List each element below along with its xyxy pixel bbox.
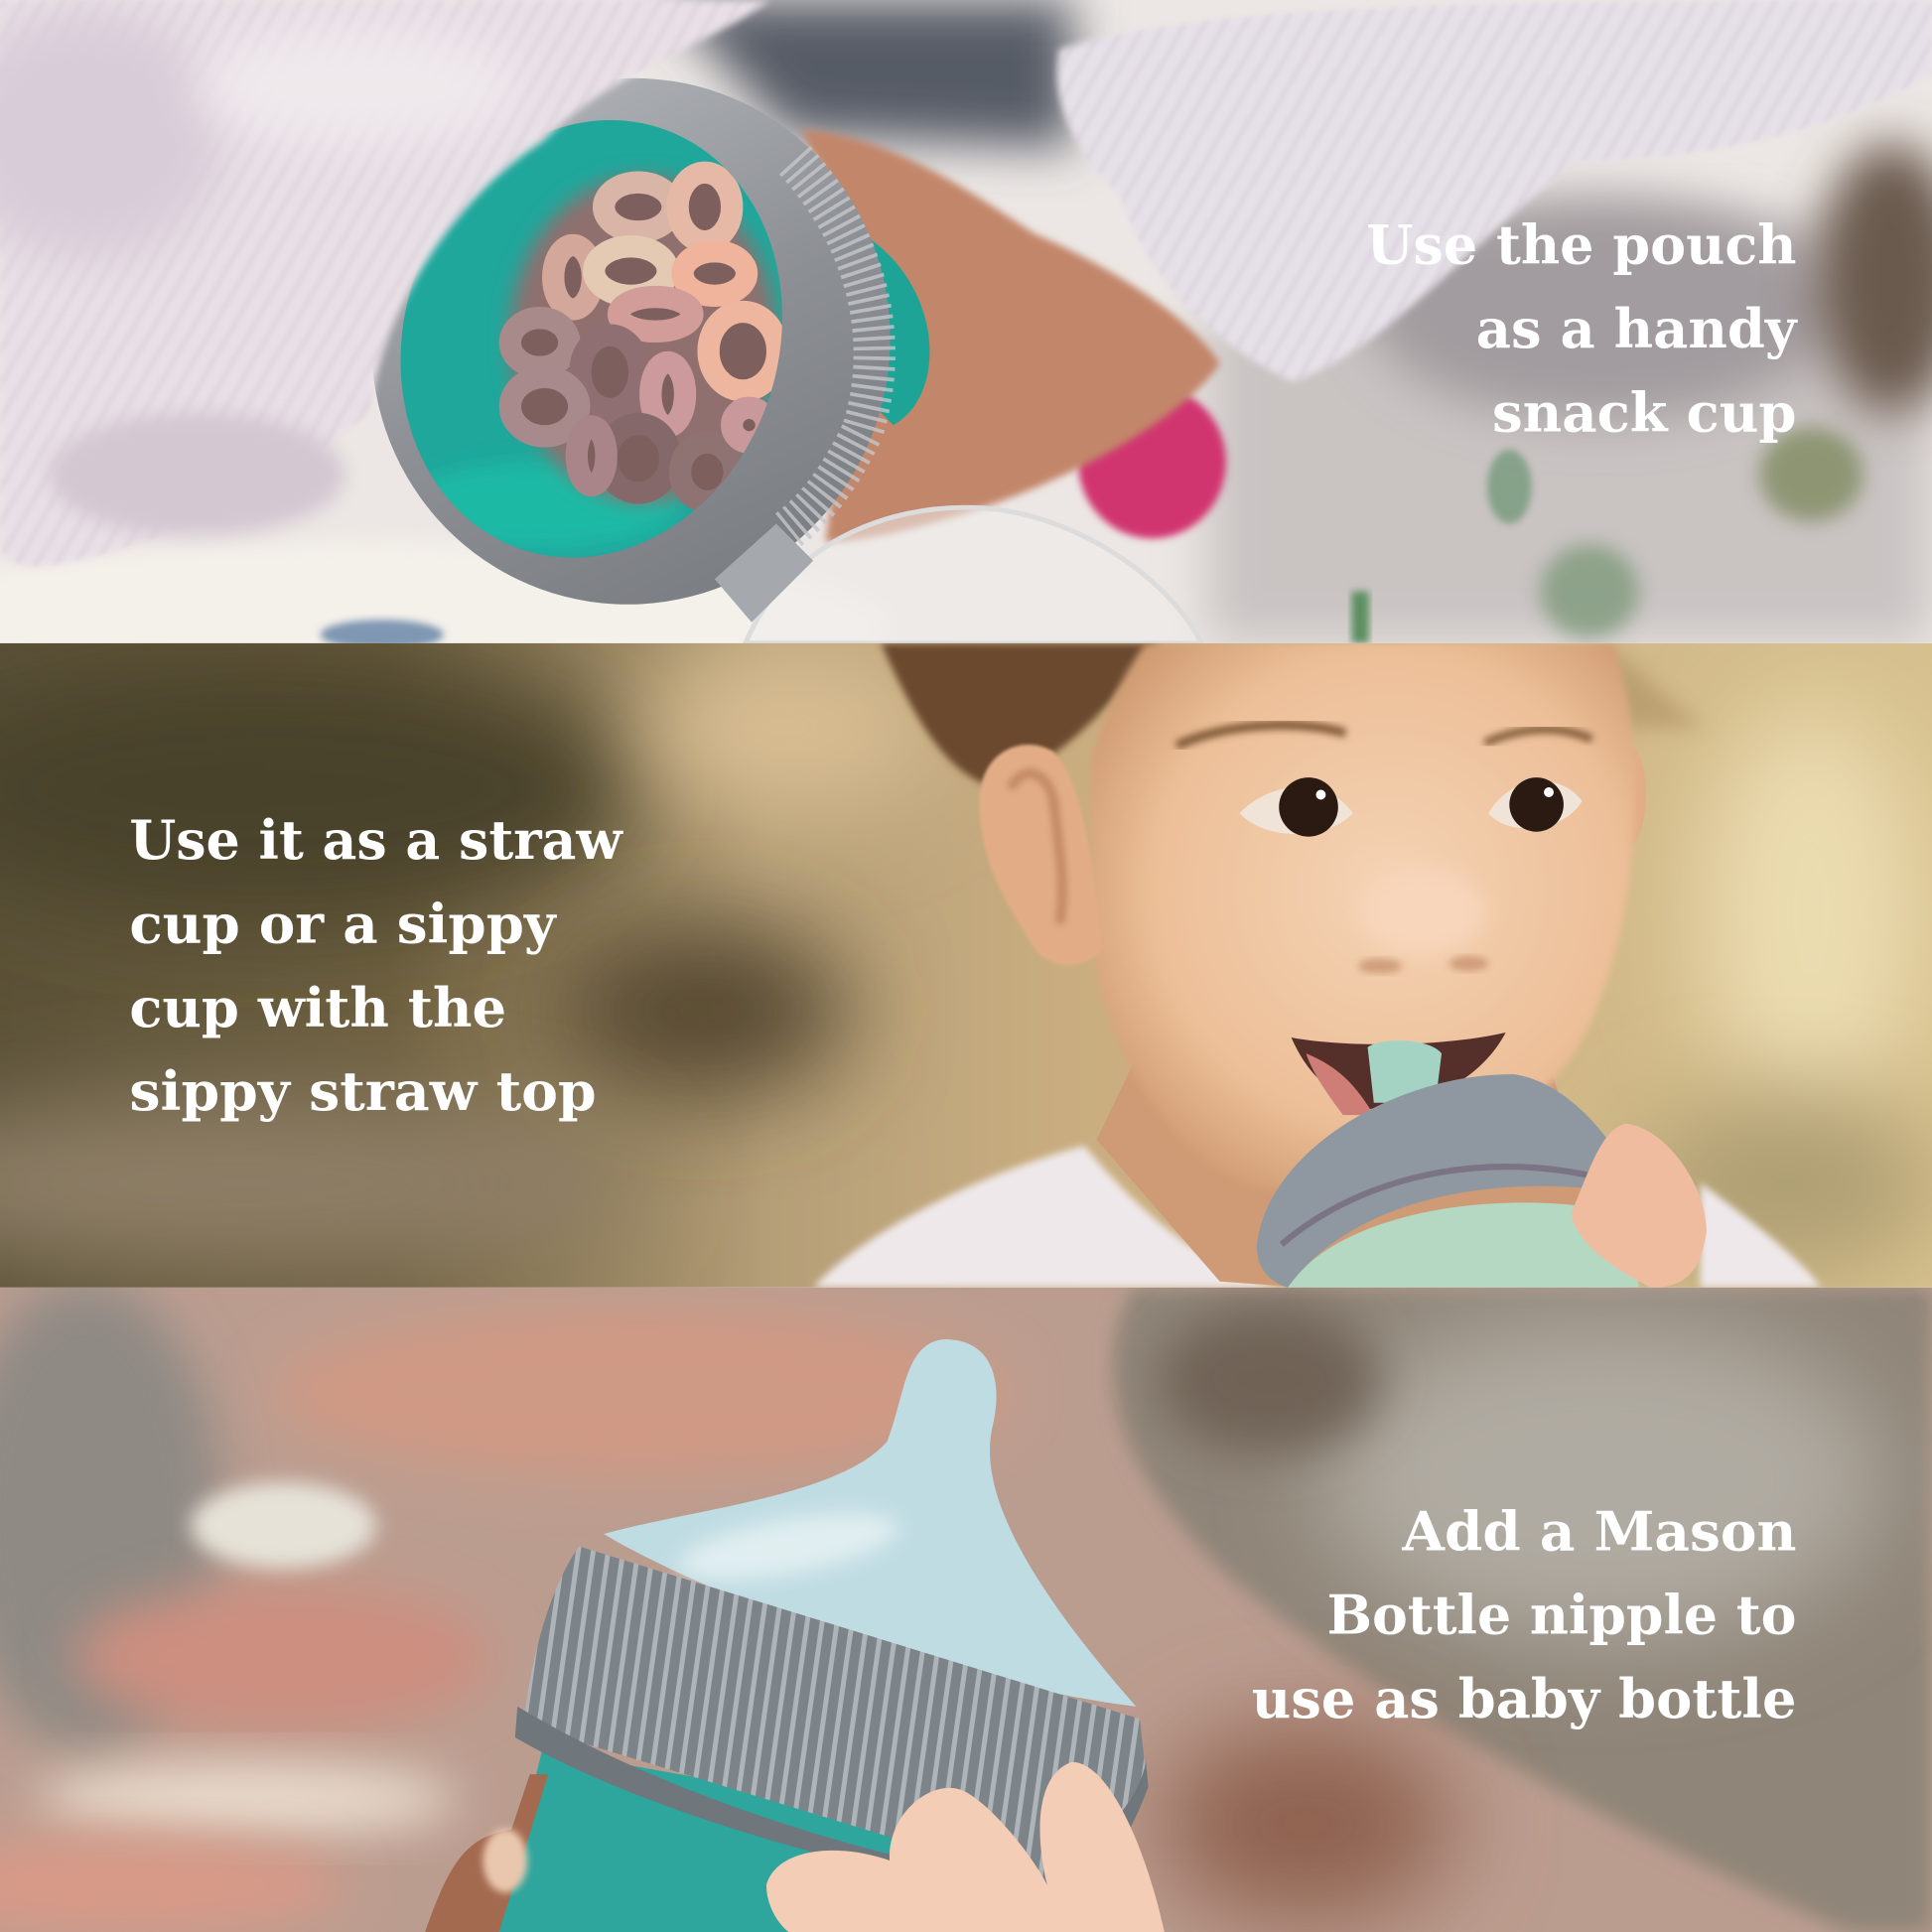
lid ribs (788, 160, 875, 530)
text: baby bottle: Add a Mason (1401, 1499, 1796, 1563)
sweater sleeve right (1052, 38, 1567, 383)
blurred background shapes (0, 1282, 1932, 1932)
silver collar (523, 1547, 1146, 1885)
text: straw cup: cup with the (129, 976, 506, 1039)
text: snack cup: as a handy (1476, 297, 1799, 360)
ear (980, 745, 1103, 965)
right ear (1606, 743, 1646, 847)
text: straw cup: cup or a sippy (129, 892, 558, 955)
text: snack cup (1366, 213, 1799, 444)
silver lid ring (373, 77, 891, 605)
panel: child drinking photo (0, 640, 1932, 1288)
bottle body (499, 1749, 1023, 1932)
neck (1097, 986, 1601, 1288)
collar lower lip (515, 1707, 1149, 1903)
panel: snack cup photo (0, 0, 1932, 715)
sweater sleeve left (0, 0, 770, 567)
text: straw cup (129, 808, 624, 1123)
jar opening (401, 120, 782, 558)
face (1090, 643, 1635, 1190)
baby hands (425, 1762, 1165, 1932)
nose (1358, 869, 1488, 973)
pink fabric (1078, 385, 1226, 538)
hinge (715, 523, 813, 622)
text: straw cup: Use it as a straw (129, 808, 624, 872)
eyes (1240, 786, 1353, 834)
teal body edge (872, 240, 929, 425)
text: snack cup: snack cup (1492, 380, 1796, 444)
lid band (1282, 1167, 1626, 1244)
child hand (1571, 1124, 1707, 1288)
text: baby bottle: use as baby bottle (1252, 1667, 1796, 1730)
eyebrows (1176, 725, 1345, 746)
text: straw cup: sippy straw top (129, 1059, 597, 1123)
text: baby bottle: Bottle nipple to (1327, 1584, 1796, 1647)
cereal (510, 173, 777, 501)
shirt (813, 1146, 1821, 1288)
nipple (604, 1339, 1136, 1707)
nipple highlight (675, 1500, 902, 1592)
straw (1368, 1040, 1442, 1103)
floral dress background (0, 0, 1932, 715)
text: baby bottle (1252, 1499, 1796, 1730)
bottle lid (1257, 1074, 1639, 1288)
text: snack cup: Use the pouch (1366, 213, 1796, 277)
blurred background shapes (0, 640, 1932, 1269)
bottle (1288, 1202, 1639, 1288)
hair (881, 643, 1159, 788)
clear cap (746, 507, 1201, 643)
hand (801, 129, 1220, 542)
panel: baby bottle photo (0, 1282, 1932, 1932)
mouth (1292, 1033, 1506, 1109)
